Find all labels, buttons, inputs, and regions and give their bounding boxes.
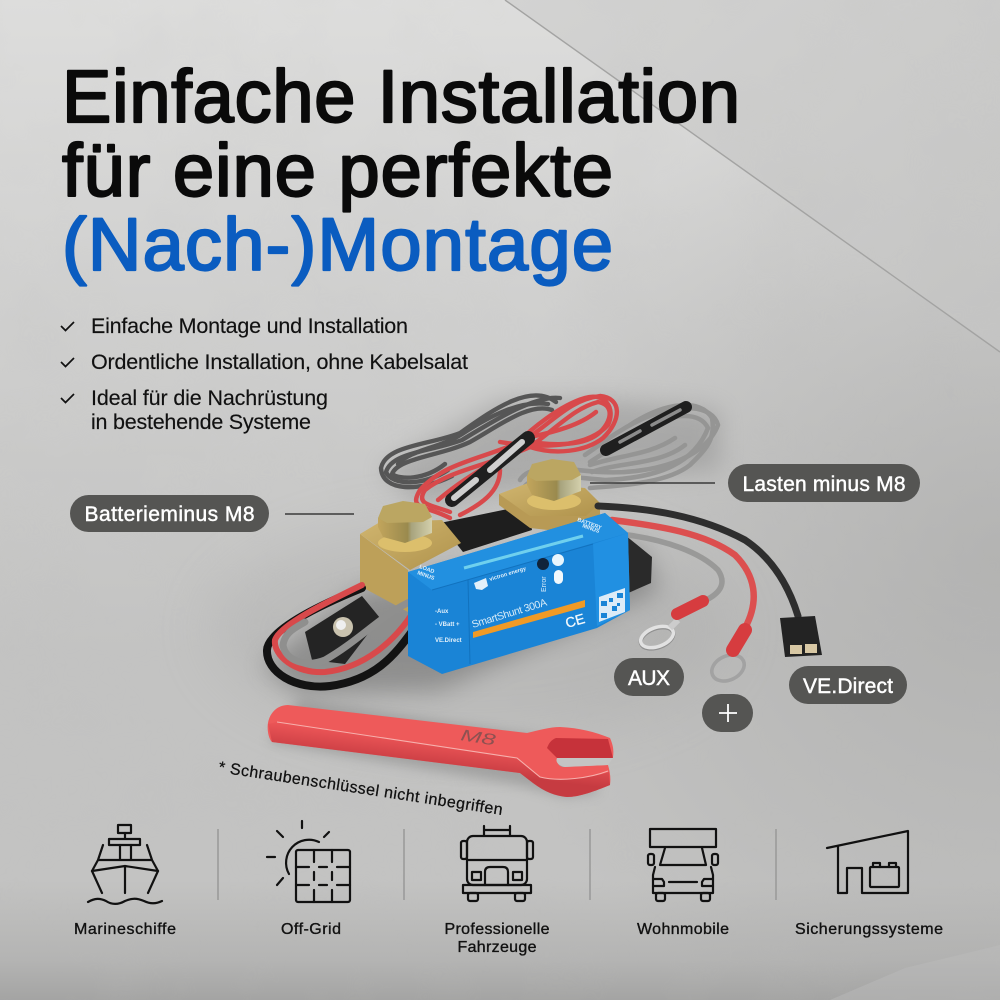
application icons row xyxy=(74,821,943,956)
blue SmartShunt housing: CE xyxy=(563,610,587,631)
product text: SmartShunt 300A xyxy=(470,597,548,631)
icon: building with battery xyxy=(827,831,908,893)
orange stripe xyxy=(473,600,585,638)
rear cables: dark grey loop xyxy=(381,395,560,487)
plus ring terminal xyxy=(708,630,748,686)
jaw inner wall xyxy=(547,738,613,758)
blue SmartShunt housing: VE.Direct xyxy=(435,638,462,644)
callout: Lasten minus M8: Lasten minus M8 xyxy=(742,473,906,496)
product photo: SmartShunt with cables xyxy=(262,395,822,695)
label: Marineschiffe: Marineschiffe xyxy=(74,921,176,938)
right nut xyxy=(527,459,581,510)
rear cables: red loop xyxy=(416,396,617,518)
VE.Direct connector xyxy=(780,616,822,657)
callout: Batterieminus M8 xyxy=(70,495,354,532)
icon: solar panel with sun xyxy=(267,821,350,902)
blue SmartShunt housing xyxy=(408,513,630,674)
title: für eine perfekte xyxy=(62,129,613,212)
blue SmartShunt housing: MINUS xyxy=(416,570,435,582)
bullet 3: in bestehende Systeme xyxy=(91,410,311,434)
blue SmartShunt housing: - VBatt + xyxy=(435,622,460,628)
blue SmartShunt housing: LOAD xyxy=(418,564,435,575)
callout: Lasten minus M8 xyxy=(590,464,920,502)
blue SmartShunt housing: Error xyxy=(541,576,548,592)
right cables xyxy=(598,506,798,628)
LEDs xyxy=(537,558,549,570)
black shunt bar xyxy=(440,505,532,552)
label: Wohnmobile: Wohnmobile xyxy=(637,921,729,938)
right brass block xyxy=(499,483,600,534)
icon: motorhome xyxy=(648,829,718,901)
jaw opening xyxy=(556,758,613,767)
label: Professionelle Fahrzeuge: Professionelle xyxy=(444,921,550,938)
blue SmartShunt housing: -Aux xyxy=(435,609,449,615)
right bracket xyxy=(625,535,652,594)
bullet 3 xyxy=(61,386,328,434)
label: Off-Grid: Off-Grid xyxy=(281,921,341,938)
callout: Batterieminus M8: Batterieminus M8 xyxy=(84,503,254,526)
callout: plus xyxy=(702,694,753,732)
AUX ring terminal xyxy=(638,601,703,653)
label: Professionelle Fahrzeuge: Fahrzeuge xyxy=(458,939,537,956)
bullet 2: Ordentliche Installation, ohne Kabelsalat xyxy=(91,350,468,374)
rear cables: light grey loop xyxy=(520,405,718,488)
left nut xyxy=(378,501,432,552)
icon: truck xyxy=(461,826,533,901)
bullet list xyxy=(61,314,468,434)
wrench: M8 xyxy=(459,727,497,749)
left bracket with screw xyxy=(305,596,380,664)
icon: ship xyxy=(88,825,162,904)
floor shadow xyxy=(262,545,660,695)
title: Einfache Installation xyxy=(62,55,740,138)
left brass block xyxy=(360,520,461,612)
bullet 3: Ideal für die Nachrüstung xyxy=(91,386,328,410)
title xyxy=(62,55,740,286)
callout: VE.Direct: VE.Direct xyxy=(803,675,893,698)
callout: VE.Direct xyxy=(789,666,907,704)
fuse holders xyxy=(452,407,686,500)
QR code xyxy=(599,588,625,622)
callout: AUX xyxy=(614,658,684,696)
callout: AUX: AUX xyxy=(628,667,670,690)
wrench xyxy=(268,700,613,797)
divider lines xyxy=(218,829,776,900)
title: (Nach-)Montage xyxy=(62,203,613,286)
blue SmartShunt housing: MINUS xyxy=(581,523,600,535)
front-left cables xyxy=(267,585,413,687)
blue SmartShunt housing: victron energy xyxy=(489,566,528,583)
label: Sicherungssysteme: Sicherungssysteme xyxy=(795,921,943,938)
label: Professionelle Fahrzeuge xyxy=(444,921,550,956)
bullet 1: Einfache Montage und Installation xyxy=(91,314,408,338)
wrench note: * Schraubenschlüssel nicht inbegriffen xyxy=(217,759,504,819)
blue SmartShunt housing: BATTERY xyxy=(576,517,603,532)
